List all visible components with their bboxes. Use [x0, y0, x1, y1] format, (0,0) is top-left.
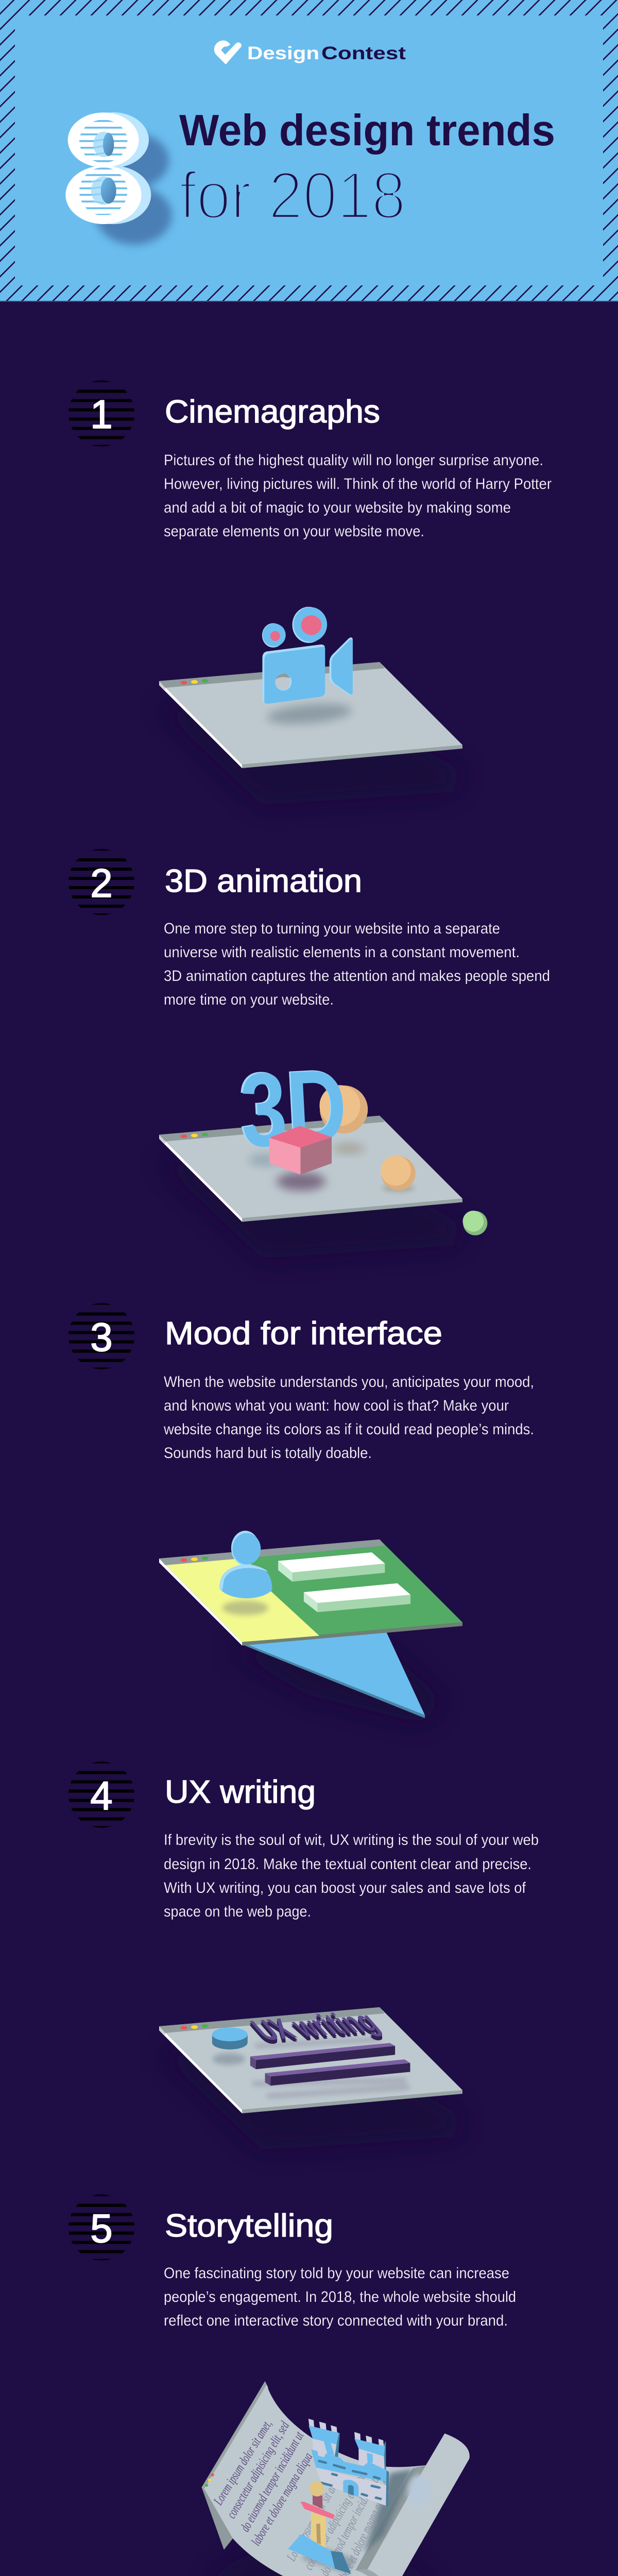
body text: design in 2018. Make the textual content clear and precise.	[164, 1856, 531, 1873]
body text	[164, 2265, 516, 2329]
illustration: colored interface with user figure	[159, 1531, 462, 1723]
paper text: consectetur adipisicing elit, sed	[301, 2469, 369, 2572]
body text: Pictures of the highest quality will no longer surprise anyone.	[164, 452, 543, 469]
body text: people’s engagement. In 2018, the whole website should	[164, 2289, 516, 2306]
number badge 2	[68, 849, 134, 915]
blue triangle	[242, 1631, 425, 1718]
paper text: Lorem ipsum dolor sit amet,	[211, 2417, 275, 2508]
big number 8	[65, 112, 172, 245]
illustration: 3D text, cube and spheres	[159, 1046, 487, 1258]
logo: Contest	[321, 43, 406, 63]
body text: 3D animation captures the attention and makes people spend	[164, 968, 550, 985]
title: Web design trends	[179, 106, 555, 155]
body text: website change its colors as if it could read people’s minds.	[163, 1421, 534, 1438]
body text: One fascinating story told by your website can increase	[164, 2265, 509, 2282]
heading: UX writing	[165, 1774, 316, 1810]
sword	[288, 2481, 351, 2574]
body text: When the website understands you, anticipates your mood,	[164, 1374, 534, 1391]
number badge 4: 4	[90, 1773, 113, 1818]
body text: However, living pictures will. Think of the world of Harry Potter	[164, 476, 552, 493]
trend 4: UX writing	[68, 1762, 539, 2150]
castle	[308, 2419, 389, 2506]
body text: and knows what you want: how cool is that? Make your	[164, 1397, 509, 1414]
number badge 3	[68, 1303, 134, 1369]
logo: Design	[247, 43, 319, 63]
logo	[214, 40, 406, 64]
title: for 2018	[179, 158, 406, 233]
number badge 4	[68, 1762, 134, 1828]
illustration: 3D text, cube and spheres: 3D	[238, 1047, 350, 1169]
body text: If brevity is the soul of wit, UX writing is the soul of your web	[164, 1832, 539, 1849]
paper text: consectetur adipisicing elit, sed	[224, 2418, 293, 2521]
body text: space on the web page.	[164, 1903, 311, 1920]
body text: With UX writing, you can boost your sales and save lots of	[164, 1879, 526, 1896]
heading: Mood for interface	[165, 1316, 442, 1351]
illustration: curled paper scroll with castle and sword	[201, 2381, 470, 2576]
body text: Sounds hard but is totally doable.	[164, 1445, 372, 1462]
illustration: UX writing text on browser	[159, 2005, 463, 2150]
illustration: UX writing text on browser: UX writing	[244, 2009, 387, 2050]
illustration: browser plate with movie camera	[159, 607, 463, 805]
illustration: 3D text, cube and spheres: 3D	[236, 1046, 349, 1168]
title	[179, 106, 555, 233]
illustration: UX writing text on browser: UX writing	[244, 2008, 387, 2049]
paper text: do eiusmod tempor incididunt ut	[237, 2429, 307, 2534]
illustration: UX writing text on browser: UX writing	[244, 2005, 387, 2046]
heading: Cinemagraphs	[165, 394, 380, 430]
trend 1: Cinemagraphs	[68, 380, 552, 805]
trend 2: 3D animation	[68, 849, 550, 1258]
paper text	[211, 2417, 393, 2576]
paper text: labore et dolore magna aliqua	[248, 2450, 316, 2548]
number badge 5	[68, 2195, 134, 2261]
paper text: do eiusmod tempor incididunt ut	[317, 2471, 383, 2576]
body text: more time on your website.	[164, 991, 334, 1008]
body text: One more step to turning your website into a separate	[164, 920, 500, 937]
body text	[164, 1832, 539, 1920]
header banner	[0, 0, 618, 302]
paper text: Lorem ipsum dolor sit amet,	[283, 2472, 345, 2564]
body text: and add a bit of magic to your website by making some	[164, 499, 511, 516]
body text	[164, 452, 552, 540]
number badge 1	[68, 380, 134, 446]
number badge 3: 3	[90, 1314, 113, 1360]
body text: reflect one interactive story connected with your brand.	[164, 2312, 508, 2329]
body text: separate elements on your website move.	[164, 523, 424, 540]
trend 3: Mood for interface	[68, 1303, 534, 1723]
number badge 2: 2	[90, 860, 113, 906]
body text	[163, 1374, 534, 1462]
trend 5: Storytelling	[68, 2195, 516, 2576]
body text: universe with realistic elements in a constant movement.	[164, 944, 520, 961]
number badge 5: 5	[90, 2206, 113, 2251]
heading: 3D animation	[165, 863, 362, 899]
body text	[164, 920, 550, 1008]
heading: Storytelling	[165, 2208, 333, 2244]
number badge 1: 1	[90, 392, 113, 437]
